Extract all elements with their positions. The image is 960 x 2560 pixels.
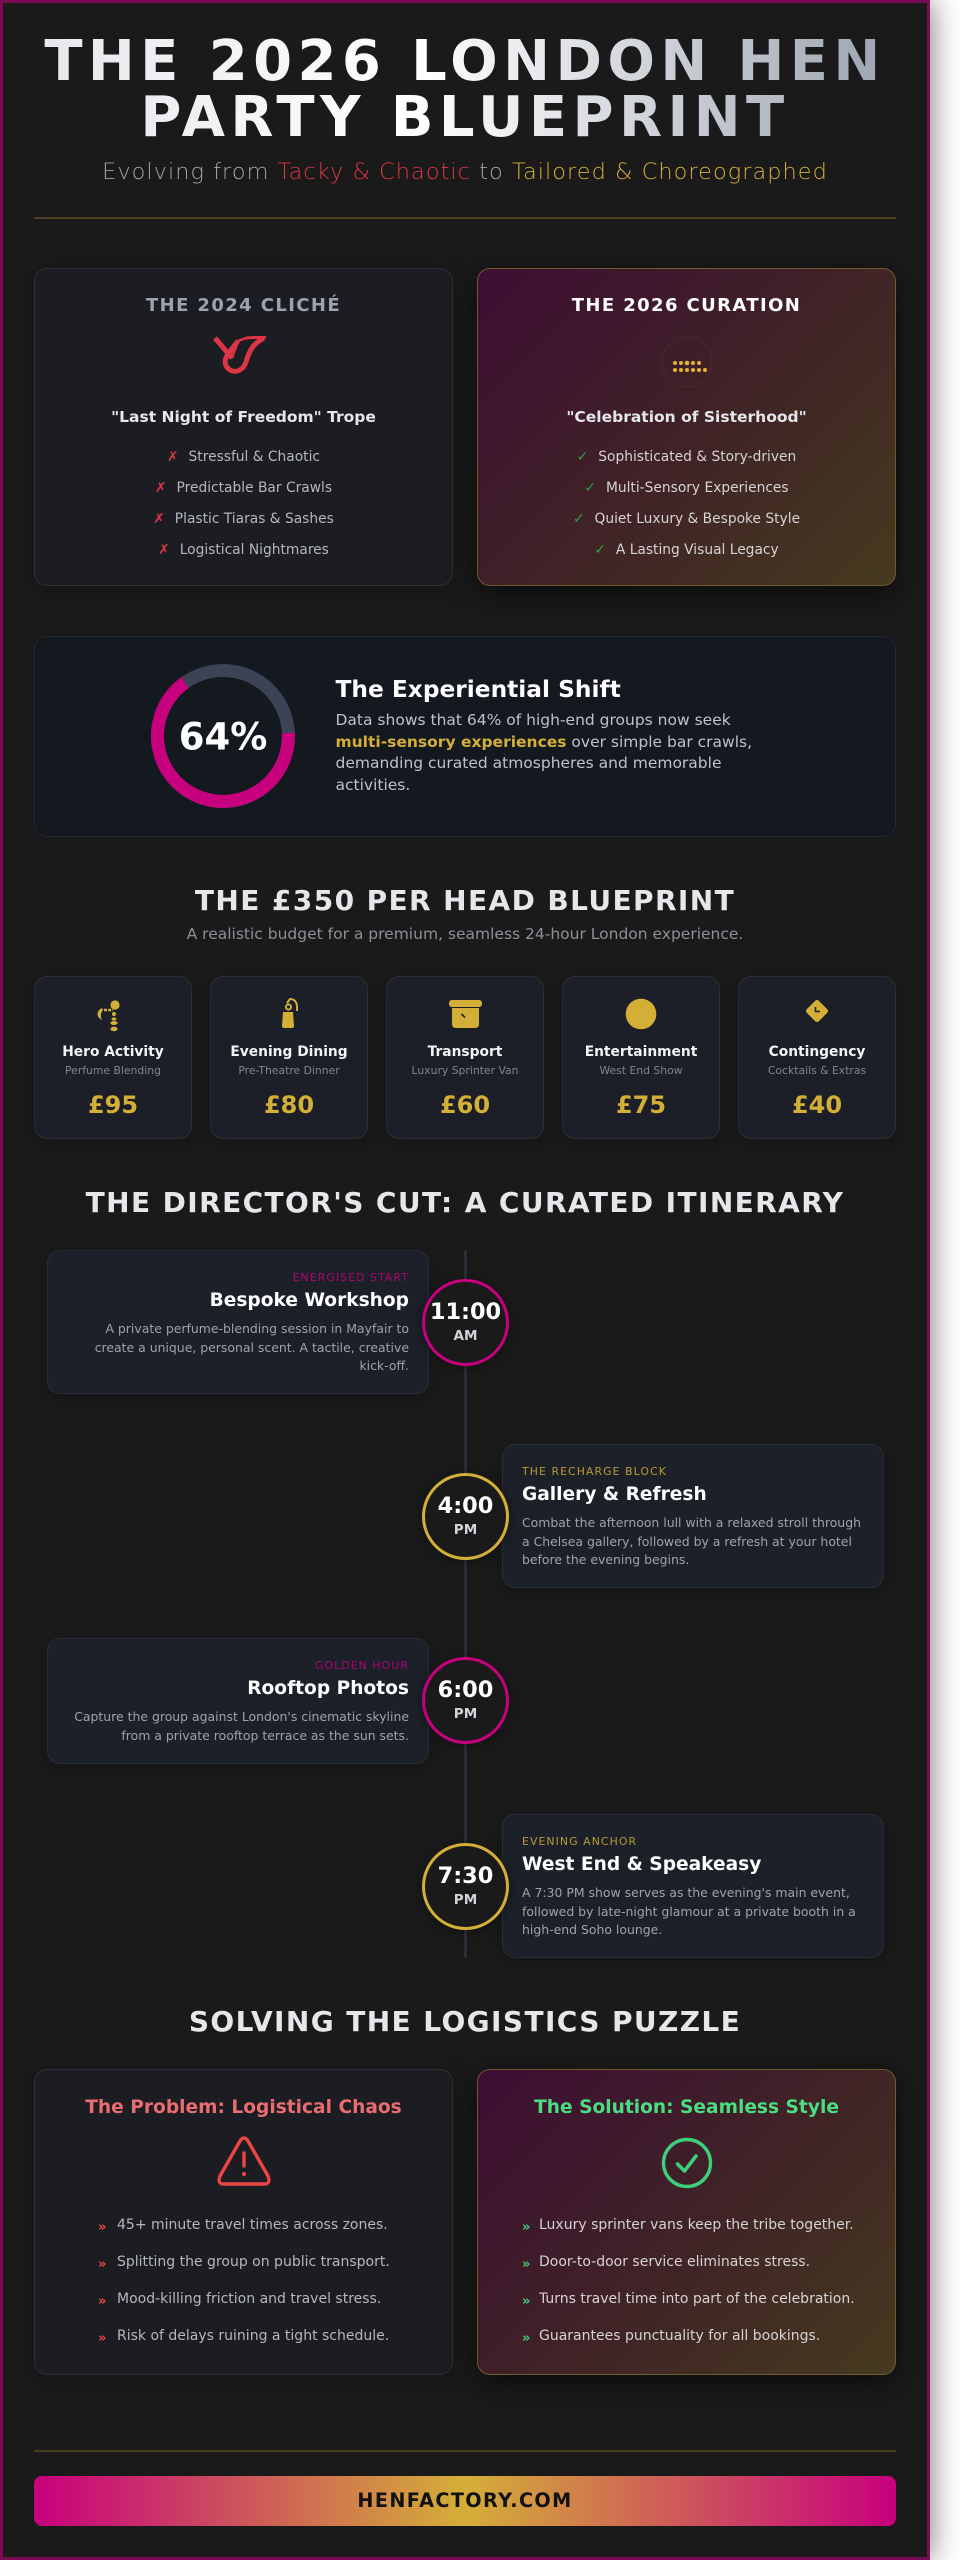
event card: gallery and refresh (502, 1444, 884, 1588)
budget card: transport (386, 976, 544, 1139)
icon: diamond clock (806, 1000, 828, 1022)
list text: Guarantees punctuality for all bookings. (539, 2328, 820, 2344)
eyebrow: THE RECHARGE BLOCK (522, 1465, 667, 1478)
label: Hero Activity (62, 1044, 164, 1060)
label: Evening Dining (230, 1044, 348, 1060)
price: £60 (440, 1091, 490, 1119)
list item: » (522, 2220, 530, 2235)
list text: Door-to-door service eliminates stress. (539, 2254, 810, 2270)
time marker: 4:00 PM: PM (454, 1522, 477, 1538)
time marker: 6:00 PM: PM (454, 1706, 477, 1722)
event description: followed by late-night glamour at a private booth in a (522, 1904, 856, 1919)
list text: Risk of delays ruining a tight schedule. (117, 2328, 389, 2344)
panel: the 2026 curation (477, 268, 896, 586)
budget card: evening dining (210, 976, 368, 1139)
price: £75 (616, 1091, 666, 1119)
list item: » (98, 2257, 106, 2272)
time marker: 6:00 PM (422, 1657, 509, 1744)
text: experiential body: multi-sensory experiences over simple bar crawls, (336, 733, 752, 751)
event description: a Chelsea gallery, followed by a refresh at your hotel (522, 1534, 852, 1549)
list item: » (98, 2220, 106, 2235)
time marker: 7:30 PM: 7:30 (438, 1863, 493, 1889)
text: experiential body: activities. (336, 776, 410, 794)
event description (522, 1515, 861, 1567)
icon: warning triangle (217, 2136, 271, 2186)
event description: Combat the afternoon lull with a relaxed stroll through (522, 1515, 861, 1530)
panel: experiential shift (34, 636, 896, 837)
panel: the problem (34, 2069, 453, 2375)
event description (522, 1885, 856, 1937)
list item: ✓ Sophisticated & Story-driven (577, 449, 796, 465)
icon: broken glass (213, 336, 266, 374)
list item: ✓ Quiet Luxury & Bespoke Style (573, 511, 800, 527)
list text: Splitting the group on public transport. (117, 2254, 390, 2270)
subtitle: Evolving from Tacky & Chaotic to Tailored & Choreographed (102, 159, 828, 185)
icon: check circle (662, 2138, 712, 2188)
problem heading: The Problem: Logistical Chaos (85, 2097, 402, 2118)
title (34, 34, 896, 146)
eyebrow: ENERGISED START (293, 1271, 409, 1284)
sublabel: West End Show (599, 1064, 683, 1077)
icon: box (449, 1000, 482, 1028)
icon: disc (626, 998, 656, 1030)
title: PARTY BLUEPRINT (140, 85, 790, 150)
event title: Gallery & Refresh (522, 1484, 707, 1505)
footer banner: HENFACTORY.COM (357, 2489, 573, 2512)
list item: ✗ Plastic Tiaras & Sashes (153, 511, 334, 527)
donut value: 64% (179, 716, 267, 758)
list item: ✗ Stressful & Chaotic (167, 449, 320, 465)
text: experiential body: Data shows that 64% of high-end groups now seek (336, 711, 731, 729)
text: sisterhood: "Celebration of Sisterhood" (566, 408, 807, 426)
sublabel: Luxury Sprinter Van (412, 1064, 518, 1077)
list text: 45+ minute travel times across zones. (117, 2217, 388, 2233)
label: Contingency (769, 1044, 865, 1060)
time marker: 11:00 AM: 11:00 (430, 1299, 501, 1325)
eyebrow: EVENING ANCHOR (522, 1835, 637, 1848)
panel: the solution (477, 2069, 896, 2375)
list item: ✓ Multi-Sensory Experiences (584, 480, 789, 496)
sublabel: Cocktails & Extras (768, 1064, 866, 1077)
list item: » (98, 2294, 106, 2309)
time marker: 4:00 PM (422, 1473, 509, 1560)
budget card: hero activity (34, 976, 192, 1139)
event description (74, 1709, 409, 1743)
text: budget subtitle: A realistic budget for a premium, seamless 24-hour London experience. (187, 925, 743, 943)
price: £95 (88, 1091, 138, 1119)
event title: West End & Speakeasy (522, 1854, 761, 1875)
event description: A 7:30 PM show serves as the evening's main event, (522, 1885, 850, 1900)
time marker: 7:30 PM (422, 1843, 509, 1930)
list item: » (522, 2257, 530, 2272)
text: trope: "Last Night of Freedom" Trope (111, 408, 376, 426)
list item: ✓ A Lasting Visual Legacy (594, 542, 779, 558)
list text: Luxury sprinter vans keep the tribe together. (539, 2217, 854, 2233)
event description: Capture the group against London's cinematic skyline (74, 1709, 409, 1724)
solution heading: The Solution: Seamless Style (534, 2097, 839, 2118)
list item: » (522, 2331, 530, 2346)
time marker: 11:00 AM: AM (453, 1328, 478, 1344)
heading: budget: THE £350 PER HEAD BLUEPRINT (195, 884, 735, 917)
event title: Bespoke Workshop (210, 1290, 409, 1311)
heading: itinerary: THE DIRECTOR'S CUT: A CURATED ITINERARY (86, 1186, 844, 1219)
heading: 2026 curation: THE 2026 CURATION (572, 294, 801, 316)
text: experiential body (336, 711, 752, 794)
event description: create a unique, personal scent. A tactile, creative (95, 1340, 409, 1355)
eyebrow: GOLDEN HOUR (315, 1659, 409, 1672)
list item: ✗ Logistical Nightmares (158, 542, 329, 558)
event description: kick-off. (359, 1358, 409, 1373)
donut chart: 64% (151, 664, 295, 808)
list item: » (98, 2331, 106, 2346)
event description: before the evening begins. (522, 1552, 689, 1567)
event description: high-end Soho lounge. (522, 1922, 662, 1937)
icon: dotted sparkle (662, 336, 712, 388)
panel: the 2024 cliche (34, 268, 453, 586)
list item: » (522, 2294, 530, 2309)
text: experiential body: demanding curated atmospheres and memorable (336, 754, 722, 772)
heading: logistics: SOLVING THE LOGISTICS PUZZLE (189, 2005, 741, 2038)
event description: A private perfume-blending session in Mayfair to (105, 1321, 409, 1336)
time marker: 7:30 PM: PM (454, 1892, 477, 1908)
time marker: 6:00 PM: 6:00 (438, 1677, 493, 1703)
event title: Rooftop Photos (247, 1678, 409, 1699)
heading: experiential shift: The Experiential Shift (336, 676, 621, 702)
time marker: 4:00 PM: 4:00 (438, 1493, 493, 1519)
list text: Mood-killing friction and travel stress. (117, 2291, 381, 2307)
list text: Turns travel time into part of the celebration. (539, 2291, 855, 2307)
event card: rooftop photos (47, 1638, 429, 1764)
list item: ✗ Predictable Bar Crawls (155, 480, 332, 496)
label: Entertainment (585, 1044, 697, 1060)
heading: 2024 cliche: THE 2024 CLICHÉ (146, 294, 341, 316)
price: £40 (792, 1091, 842, 1119)
event card: west end and speakeasy (502, 1814, 884, 1958)
icon: perfume blending (98, 1000, 120, 1032)
event description: from a private rooftop terrace as the sun sets. (121, 1728, 409, 1743)
budget card: entertainment (562, 976, 720, 1139)
title: THE 2026 LONDON HEN (44, 29, 886, 94)
icon: bottle (282, 998, 298, 1028)
time marker: 11:00 AM (422, 1279, 509, 1366)
event description (95, 1321, 409, 1373)
event card: bespoke workshop (47, 1250, 429, 1394)
sublabel: Perfume Blending (65, 1064, 161, 1077)
footer banner (34, 2476, 896, 2526)
budget card: contingency (738, 976, 896, 1139)
sublabel: Pre-Theatre Dinner (238, 1064, 340, 1077)
label: Transport (428, 1044, 502, 1060)
price: £80 (264, 1091, 314, 1119)
